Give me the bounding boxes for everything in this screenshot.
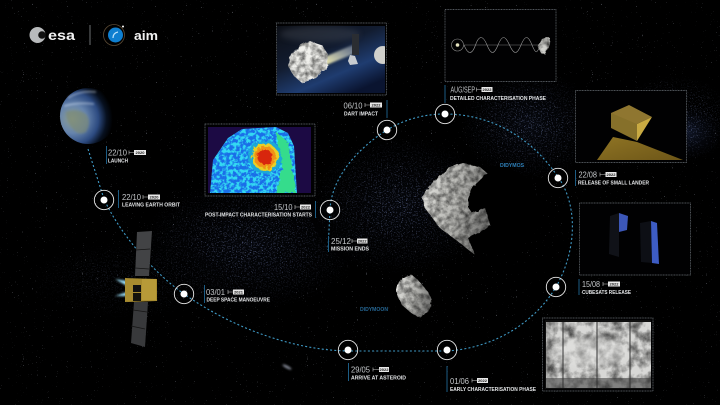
milestone: post-impact characterisation: POST-IMPACT CHARACTERISATION STARTS bbox=[205, 212, 312, 218]
node: early characterisation bbox=[437, 340, 457, 360]
earth bbox=[60, 88, 116, 144]
milestone: deep space manoeuvre: 2021 bbox=[234, 290, 244, 294]
logo: esa: esa bbox=[48, 28, 76, 43]
milestone: deep space manoeuvre bbox=[204, 285, 270, 304]
milestone: early characterisation phase: 2022 bbox=[478, 378, 488, 383]
milestone: launch: 22/10 bbox=[108, 148, 127, 158]
milestone: cubesats release: 2022 bbox=[610, 282, 619, 286]
milestone: mission ends bbox=[328, 236, 369, 252]
didymoon asteroid bbox=[360, 275, 432, 317]
logo: esa bbox=[30, 27, 76, 43]
node: deep space manoeuvre bbox=[174, 284, 194, 304]
impact beam bbox=[327, 44, 354, 66]
solar panel upper bbox=[135, 231, 152, 276]
logo: aim bbox=[90, 24, 158, 46]
panel: post-impact thermal map bbox=[205, 124, 315, 196]
target asteroid bbox=[288, 41, 328, 83]
dark side bbox=[451, 166, 539, 254]
orbit trajectory bbox=[88, 114, 572, 351]
milestone: detailed characterisation phase: 2022 bbox=[483, 87, 492, 92]
milestone: post-impact characterisation: 15/10 bbox=[274, 202, 293, 212]
didymos label: DIDYMOS bbox=[500, 163, 524, 169]
milestone: detailed characterisation phase: DETAILED CHARACTERISATION PHASE bbox=[450, 96, 546, 102]
milestone: deep space manoeuvre: DEEP SPACE MANOEUVRE bbox=[206, 298, 270, 304]
dart spacecraft bbox=[352, 34, 359, 55]
milestone: early characterisation phase: 01/06 bbox=[450, 376, 469, 386]
didymoon label: DIDYMOON bbox=[360, 307, 388, 313]
milestone: dart impact: DART IMPACT bbox=[344, 112, 379, 118]
milestone: leaving earth orbit: LEAVING EARTH ORBIT bbox=[122, 202, 181, 208]
milestone: detailed characterisation phase bbox=[445, 84, 546, 103]
panel: dart impact bbox=[276, 23, 392, 95]
milestone: early characterisation phase: EARLY CHARACTERISATION PHASE bbox=[450, 387, 536, 393]
milestone: dart impact: 06/10 bbox=[344, 100, 363, 110]
milestone: release of small lander: 2022 bbox=[607, 172, 616, 177]
milestone: deep space manoeuvre: 03/01 bbox=[206, 287, 225, 297]
milestone: arrive at asteroid: 2022 bbox=[380, 367, 389, 372]
panel: cubesats bbox=[580, 203, 690, 275]
milestone: launch bbox=[106, 146, 146, 164]
lit surface bbox=[422, 163, 490, 255]
lander base bbox=[597, 137, 683, 160]
milestone: arrive at asteroid: 29/05 bbox=[351, 364, 370, 374]
logo: aim: aim bbox=[134, 28, 158, 43]
milestone: release of small lander: RELEASE OF SMALL LANDER bbox=[578, 180, 649, 186]
node: cubesats bbox=[546, 277, 566, 297]
node: post-impact bbox=[320, 200, 340, 220]
panel: early characterisation mosaic bbox=[542, 318, 653, 391]
milestone: launch: 2020 bbox=[136, 150, 145, 155]
spacecraft bbox=[115, 231, 157, 347]
milestone: dart impact: 2022 bbox=[372, 102, 381, 108]
didymos asteroid bbox=[422, 163, 539, 255]
lander cube bbox=[611, 105, 652, 128]
spacecraft body bbox=[125, 278, 157, 302]
milestone: cubesats release: CUBESATS RELEASE bbox=[582, 290, 631, 296]
node: detailed characterisation bbox=[435, 104, 455, 124]
milestone: post-impact characterisation bbox=[205, 201, 316, 218]
thruster plumes bbox=[115, 279, 127, 296]
milestone: early characterisation phase bbox=[447, 366, 536, 393]
node: leaving earth orbit bbox=[94, 190, 114, 210]
milestone: leaving earth orbit: 22/10 bbox=[122, 192, 141, 202]
node: dart impact bbox=[377, 120, 397, 140]
panel: detailed characterisation bbox=[445, 10, 556, 82]
milestone: dart impact bbox=[344, 100, 387, 118]
solar panel lower bbox=[131, 302, 148, 347]
node: arrive at asteroid bbox=[338, 340, 358, 360]
panel: small lander bbox=[576, 90, 686, 162]
milestone: mission ends: 25/12 bbox=[331, 236, 351, 246]
milestone: arrive at asteroid: ARRIVE AT ASTEROID bbox=[351, 376, 406, 382]
milestone: cubesats release: 15/08 bbox=[582, 279, 600, 289]
milestone: release of small lander bbox=[576, 170, 649, 186]
milestone: arrive at asteroid bbox=[348, 363, 406, 382]
milestone: detailed characterisation phase: AUG/SEP bbox=[450, 84, 475, 94]
milestone: post-impact characterisation: 2022 bbox=[301, 204, 311, 210]
node: small lander bbox=[548, 168, 568, 188]
moon bbox=[374, 46, 385, 64]
milestone: launch: LAUNCH bbox=[108, 158, 128, 164]
milestone: leaving earth orbit: 2020 bbox=[150, 194, 159, 200]
milestone: mission ends: MISSION ENDS bbox=[331, 246, 369, 252]
milestone: leaving earth orbit bbox=[118, 190, 181, 208]
milestone: release of small lander: 22/08 bbox=[578, 170, 597, 180]
milestone: cubesats release bbox=[579, 279, 631, 296]
milestone: mission ends: 2022 bbox=[358, 238, 367, 244]
